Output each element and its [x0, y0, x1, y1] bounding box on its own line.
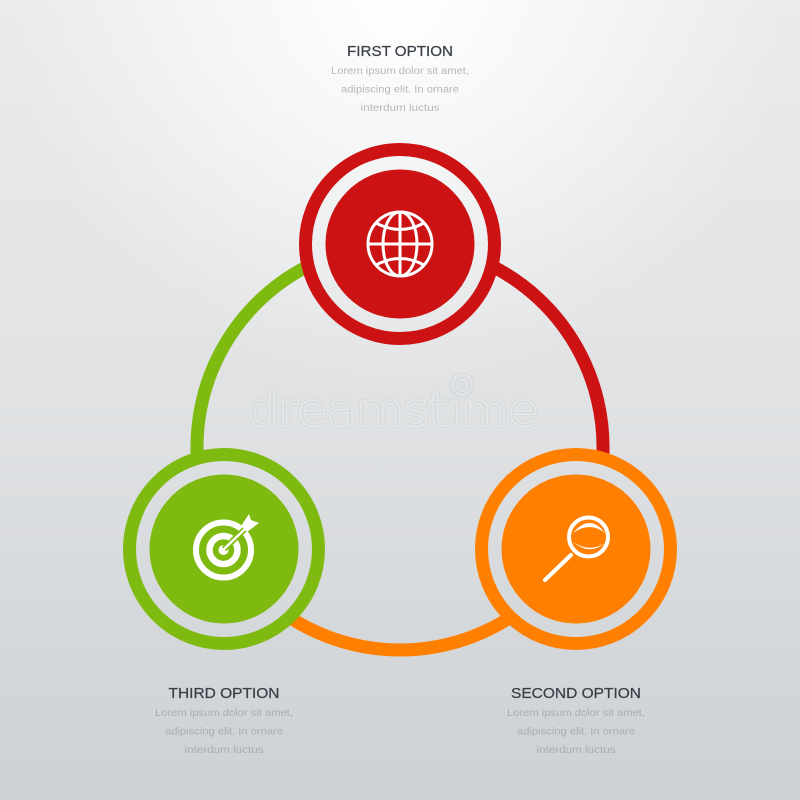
node: second option: [482, 454, 670, 644]
node: third option: [130, 454, 318, 644]
arc: orange, second to third: [290, 618, 510, 650]
text: third option: interdum luctus: [184, 744, 264, 756]
text: first option: interdum luctus: [360, 102, 440, 114]
icon: globe: [368, 212, 432, 276]
node: first option: [306, 150, 494, 338]
text: first option: FIRST OPTION: [347, 43, 453, 60]
text: first option: adipiscing elit. In ornare: [341, 84, 459, 96]
watermark: dreamstime: [248, 383, 538, 437]
text: third option: Lorem ipsum dolor sit amet,: [155, 707, 293, 719]
text: first option: Lorem ipsum dolor sit amet,: [331, 65, 469, 77]
text: third option: [155, 685, 293, 756]
arc: red, first to second: [493, 266, 603, 457]
icon: target with arrow: [196, 514, 259, 578]
text: third option: adipiscing elit. In ornare: [165, 726, 283, 738]
arc: green, third to first: [197, 266, 307, 457]
text: first option: [331, 43, 469, 114]
text: second option: interdum luctus: [536, 744, 616, 756]
text: second option: Lorem ipsum dolor sit amet,: [507, 707, 645, 719]
text: second option: adipiscing elit. In ornare: [517, 726, 635, 738]
text: third option: THIRD OPTION: [168, 685, 280, 702]
text: second option: SECOND OPTION: [511, 685, 641, 702]
icon: magnifier: [545, 518, 608, 580]
watermark: dreamstime: [248, 383, 538, 437]
text: second option: [507, 685, 645, 756]
